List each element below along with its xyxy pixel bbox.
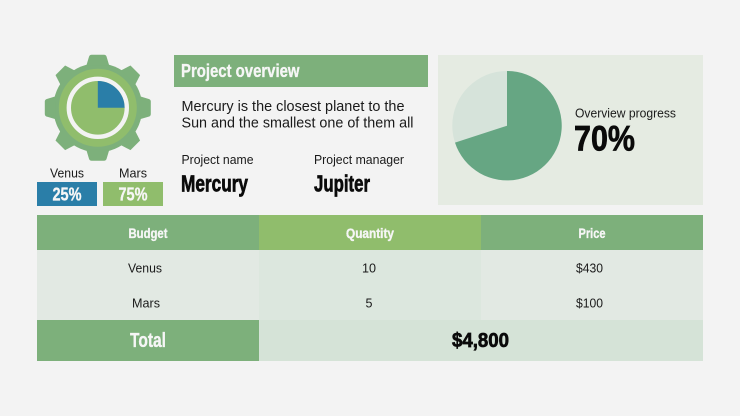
pie chart: 70% progress (452, 71, 562, 180)
legend: Venus 25% (37, 166, 97, 206)
table total row (37, 320, 703, 361)
table: budget (37, 215, 703, 361)
table rows: 10 (362, 262, 376, 276)
table header: Quantity (346, 225, 394, 241)
panel: overview progress (438, 55, 703, 205)
value: 70%: 70% (574, 120, 635, 159)
table rows: $430 (576, 262, 603, 276)
table rows: Mars (132, 297, 160, 311)
legend: Mars 75%: 75% (118, 185, 148, 205)
text block: description (182, 99, 414, 132)
text block: project name: Mercury (181, 171, 248, 197)
table total row: Total (130, 330, 166, 352)
text block: project manager (314, 153, 404, 197)
table rows: 5 (366, 297, 373, 311)
text block: project manager: Jupiter (314, 171, 370, 197)
legend: Mars 75%: Mars (119, 166, 147, 181)
heading: project overview (174, 55, 428, 87)
text block: project name (181, 153, 254, 197)
legend: Mars 75% (103, 166, 163, 206)
text block: description: Sun and the smallest one of them all (182, 116, 414, 132)
table header (37, 215, 703, 250)
text block: overview progress label: Overview progress (575, 106, 676, 121)
table header: Price (578, 225, 606, 241)
table header: Budget (128, 225, 168, 241)
legend: Venus 25%: Venus (50, 166, 84, 181)
table rows: Venus (128, 262, 162, 276)
text block: description: Mercury is the closest planet to the (182, 99, 404, 115)
heading: project overview: Project overview (181, 61, 300, 81)
text block: project name: Project name (182, 153, 254, 167)
table rows: $100 (576, 297, 603, 311)
table total row: $4,800 (452, 330, 509, 352)
table rows (37, 250, 703, 320)
icon: gear with pie (45, 55, 151, 161)
legend: Venus 25%: 25% (52, 185, 82, 205)
text block: project manager: Project manager (314, 153, 404, 167)
